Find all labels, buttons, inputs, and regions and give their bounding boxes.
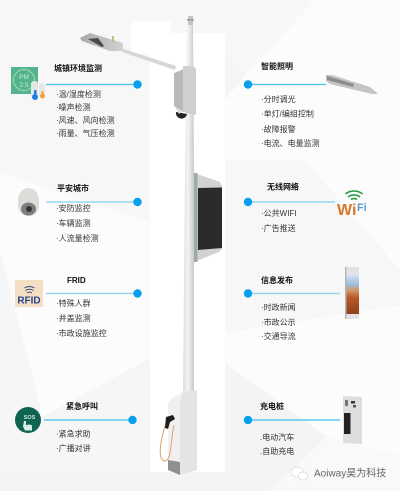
list: ·人流量检测 <box>56 233 99 243</box>
icon: SOS button: SOS <box>24 415 36 421</box>
display screen <box>194 173 222 262</box>
connector line <box>244 80 326 89</box>
connector line <box>244 198 335 206</box>
icon: PM2.5 sensor: PM <box>19 74 29 81</box>
list: ·广播对讲 <box>56 443 91 453</box>
sensor box <box>174 66 196 119</box>
list: ·风速、风向检测 <box>56 115 115 125</box>
connector line <box>46 80 142 89</box>
list: ·安防监控 <box>56 203 91 213</box>
connector line <box>46 198 142 206</box>
list: ·单灯/编组控制 <box>261 108 314 118</box>
list: ·井盖监测 <box>56 313 91 323</box>
icon: PM2.5 sensor: 2.5 <box>19 82 29 89</box>
list <box>56 203 99 243</box>
list <box>261 302 296 341</box>
list: ·噪声检测 <box>56 102 91 112</box>
heading: 充电桩 <box>260 401 284 411</box>
heading: FRID <box>67 276 86 285</box>
icon: WiFi <box>337 191 367 219</box>
icon: phone <box>345 267 359 319</box>
list <box>260 432 294 456</box>
list: ·车辆监测 <box>56 218 91 228</box>
list: ·故障报警 <box>261 124 296 134</box>
list: ·分时调光 <box>261 94 296 104</box>
list: ·市政公示 <box>261 317 296 327</box>
watermark text: Aoiway昊为科技 <box>314 466 386 480</box>
heading: 信息发布 <box>261 275 293 285</box>
list: .电动汽车 <box>260 432 294 442</box>
connector line <box>244 416 340 424</box>
list: ·特殊人群 <box>56 298 91 308</box>
heading: 紧急呼叫 <box>66 401 98 411</box>
icon: WeChat <box>291 467 308 480</box>
list <box>261 209 297 233</box>
list <box>261 94 320 148</box>
list: .自助充电 <box>260 446 294 456</box>
pole shaft <box>183 16 194 395</box>
list <box>56 89 115 138</box>
icon: dome camera <box>18 188 39 216</box>
panel: 平安城市 <box>18 183 142 243</box>
connector line <box>244 289 340 298</box>
panel: FRID <box>15 276 142 338</box>
panel: 信息发布 <box>244 267 359 341</box>
icon: RFID: RFID <box>17 296 41 306</box>
list: ·公共WIFI <box>261 209 297 218</box>
charging base <box>160 390 197 475</box>
list: ·交通导流 <box>261 331 296 341</box>
list: ·雨量、气压检测 <box>56 128 115 138</box>
list: ·紧急求助 <box>56 428 91 438</box>
watermark <box>291 466 386 480</box>
heading: 平安城市 <box>57 183 89 193</box>
list <box>56 298 107 338</box>
lamp head <box>80 33 123 51</box>
lamp arm <box>122 48 176 70</box>
list: ·市政设施监控 <box>56 328 107 338</box>
connector line <box>44 416 137 424</box>
heading: 无线网络 <box>267 182 299 192</box>
panel: 充电桩 <box>244 396 362 456</box>
icon: WiFi: Fi <box>357 202 367 214</box>
connector line <box>46 289 142 298</box>
icon: PM2.5 sensor <box>11 67 45 100</box>
icon: LED street lamp <box>326 75 378 94</box>
panel: 智能照明 <box>244 61 378 148</box>
list: ·电流、电量监测 <box>261 138 320 148</box>
panel: 无线网络 <box>244 182 367 233</box>
panel: 城镇环境监测 <box>11 63 142 138</box>
list: ·广告推送 <box>261 223 296 233</box>
list: ·时政新闻 <box>261 302 296 312</box>
list <box>56 428 91 453</box>
heading: 城镇环境监测 <box>54 63 102 73</box>
panel: 紧急呼叫 <box>15 401 137 453</box>
smart street pole <box>80 16 222 475</box>
icon: charging post <box>343 396 362 444</box>
heading: 智能照明 <box>261 61 293 71</box>
icon: WiFi: Wi <box>337 202 356 219</box>
list: ·温/湿度检测 <box>56 89 101 99</box>
